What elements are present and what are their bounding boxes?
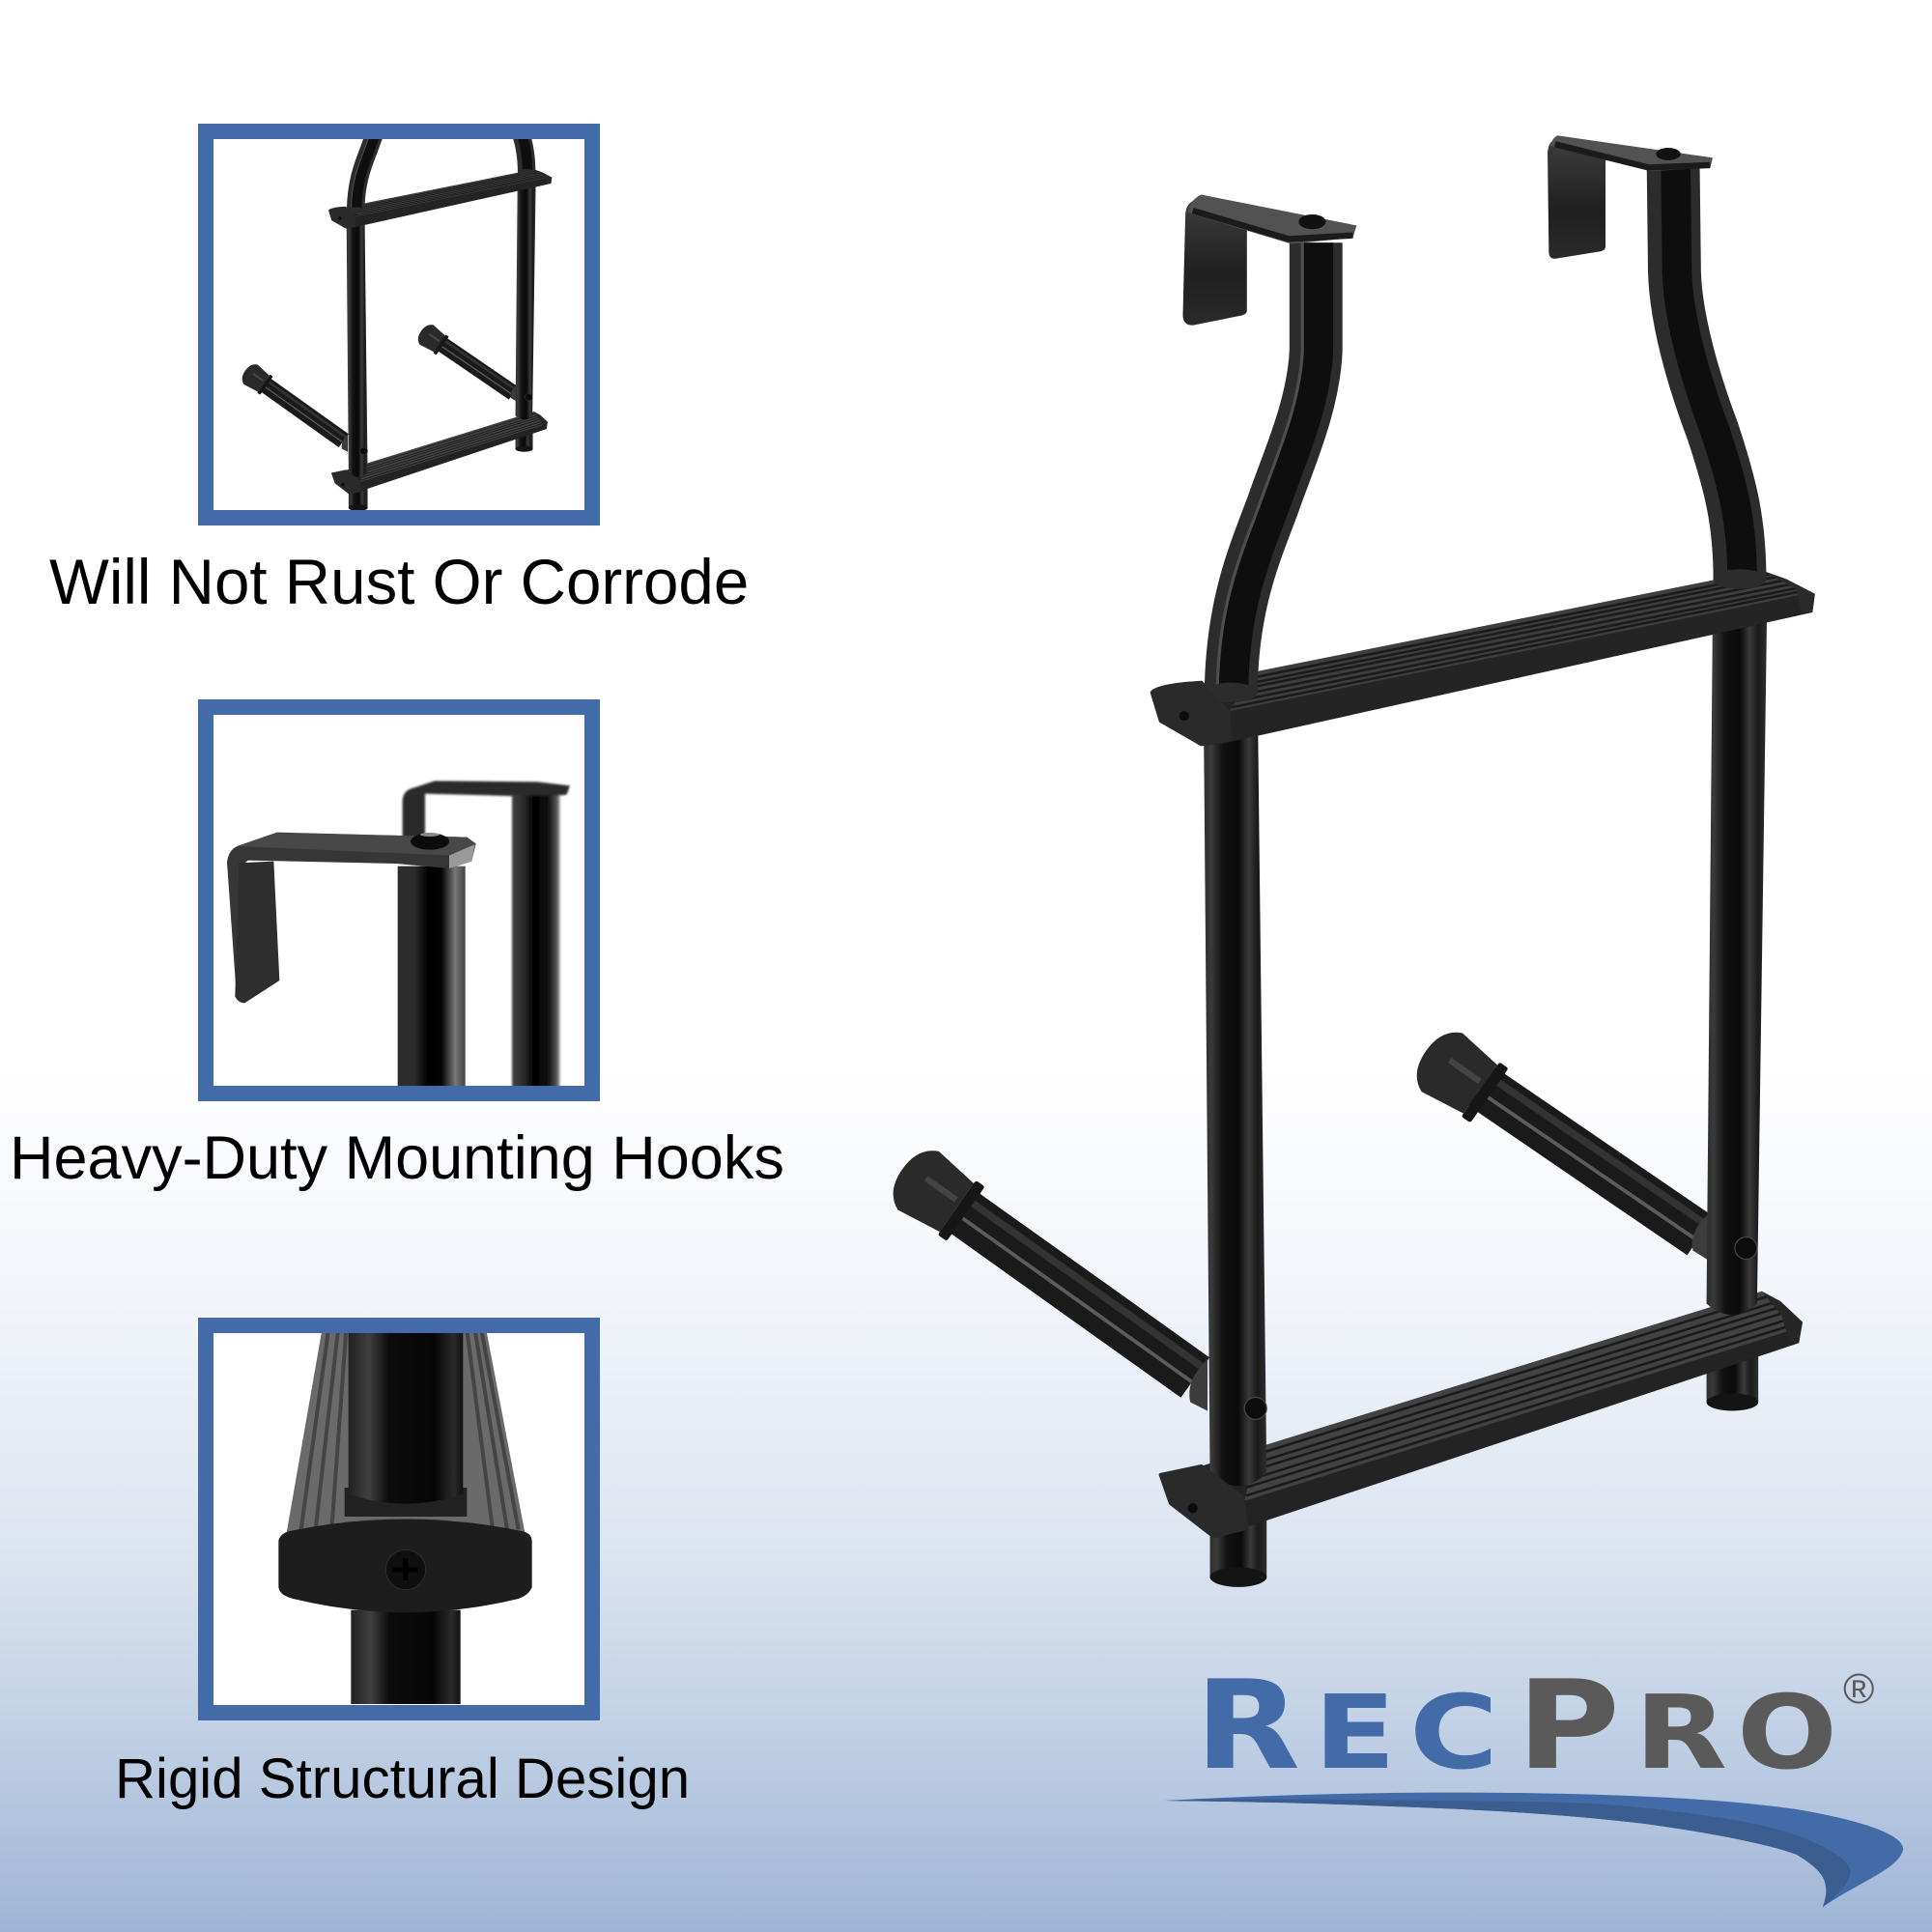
upper step	[1152, 571, 1815, 744]
panel: heavy-duty mounting hooks	[10, 707, 784, 1192]
logo: RecPro	[1165, 1654, 1903, 1907]
logo wordmark: P	[1517, 1654, 1620, 1797]
feet of the ladder rails	[1210, 1337, 1758, 1587]
right mounting hook	[1548, 135, 1713, 259]
logo wordmark	[1195, 1654, 1837, 1797]
logo wordmark: R	[1195, 1654, 1300, 1797]
logo wordmark: O	[1737, 1674, 1837, 1792]
main product image: step ladder	[882, 135, 1815, 1587]
caption 3: Rigid Structural Design	[115, 1747, 690, 1810]
logo wordmark: C	[1409, 1674, 1498, 1792]
caption 2: Heavy-Duty Mounting Hooks	[10, 1124, 784, 1192]
inset frame 3	[206, 1325, 592, 1713]
inset image: whole ladder	[242, 139, 553, 510]
lower step	[1161, 1292, 1803, 1537]
upper step end cap	[1152, 683, 1230, 744]
inset frame 2	[206, 707, 592, 1094]
panel: rigid structural design	[115, 1325, 690, 1810]
logo swoosh	[1165, 1793, 1903, 1907]
registered mark: ®	[1843, 1665, 1874, 1713]
upper curved rails	[1205, 166, 1766, 702]
left mounting hook	[1182, 195, 1356, 326]
right rear leg	[1406, 1022, 1709, 1261]
inset image: hook close-up	[227, 781, 570, 1092]
caption 1: Will Not Rust Or Corrode	[49, 547, 749, 617]
inset image: step end close-up	[278, 1330, 532, 1710]
inset frame 1	[206, 131, 592, 518]
logo wordmark: E	[1314, 1674, 1396, 1792]
panel: will not rust or corrode	[49, 124, 746, 605]
rail screws	[1244, 1237, 1757, 1419]
left rear leg	[882, 1140, 1208, 1410]
lower step end cap	[1161, 1466, 1247, 1537]
logo wordmark: R	[1634, 1674, 1727, 1792]
lower ladder rails	[1204, 616, 1767, 1486]
rear legs with rubber caps	[882, 1022, 1709, 1410]
